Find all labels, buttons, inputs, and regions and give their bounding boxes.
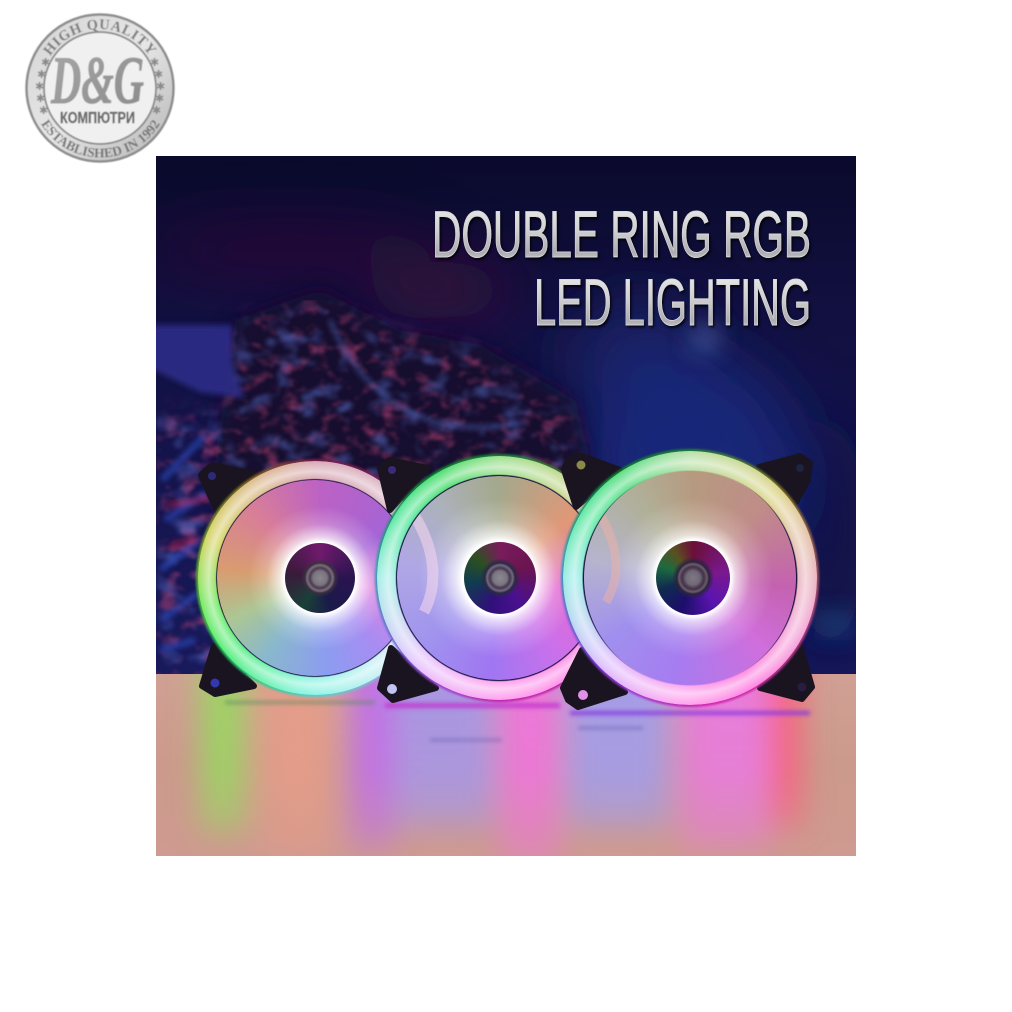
fan 1 dark inner rim <box>214 477 416 679</box>
fan 1 outer LED ring <box>198 461 404 695</box>
logo: D&G Kompiutri round seal: ✱ <box>154 69 163 81</box>
logo: D&G Kompiutri round seal <box>24 12 176 164</box>
title: Double Ring RGB LED Lighting <box>432 197 812 339</box>
logo: D&G Kompiutri round seal: ✱ <box>155 93 164 105</box>
fan 2 hub <box>464 542 536 614</box>
speckled red and blue wall art <box>156 300 596 680</box>
fan 2 dark inner rim <box>394 473 604 683</box>
panel: product photo <box>156 156 856 856</box>
fan 3 hub <box>656 541 730 615</box>
logo: D&G Kompiutri round seal: ✱ <box>150 57 159 69</box>
fan 3 frame corner brackets <box>560 452 815 710</box>
fan 1 frame corner brackets <box>198 462 257 697</box>
logo: D&G Kompiutri round seal: ESTABLISHED IN 1992 <box>40 118 160 158</box>
fan 2 ring edge <box>375 454 623 702</box>
fan 3 dark inner rim <box>581 467 799 689</box>
logo: D&G Kompiutri round seal: ✱ <box>37 69 46 81</box>
logo: D&G Kompiutri round seal: ✱ <box>152 105 161 117</box>
logo: D&G Kompiutri round seal: ✱ <box>41 57 50 69</box>
fan 2 blade disc <box>391 470 607 686</box>
logo: D&G Kompiutri round seal: ✱ <box>156 81 165 93</box>
fan 1 (left) <box>194 458 817 698</box>
fan 3 (right) <box>560 448 820 710</box>
fan 2 outer LED ring <box>377 456 589 700</box>
fan 1 ring edge <box>196 459 434 697</box>
logo: D&G Kompiutri round seal: ✱ <box>39 105 48 117</box>
fan 3 outer LED ring <box>563 451 817 705</box>
fan 3 ring edge <box>561 449 819 707</box>
fan 2 (middle) <box>373 452 590 703</box>
fan 3 blade disc <box>582 467 798 689</box>
fan 1 blade disc <box>206 466 430 690</box>
fan 3 see-through ghost of neighbouring ring <box>599 514 620 604</box>
logo: D&G Kompiutri round seal: КОМПЮТРИ <box>60 110 135 127</box>
fan 2 frame corner brackets <box>377 457 439 703</box>
fan 1 hub <box>285 543 355 613</box>
logo: D&G Kompiutri round seal: ✱ <box>35 81 44 93</box>
logo: D&G Kompiutri round seal: HIGH QUALITY <box>42 18 157 56</box>
photo background: dim room and desk <box>156 156 856 856</box>
fan 2 see-through ghost of neighbouring ring <box>412 514 438 614</box>
logo: D&G Kompiutri round seal: ✱ <box>36 93 45 105</box>
